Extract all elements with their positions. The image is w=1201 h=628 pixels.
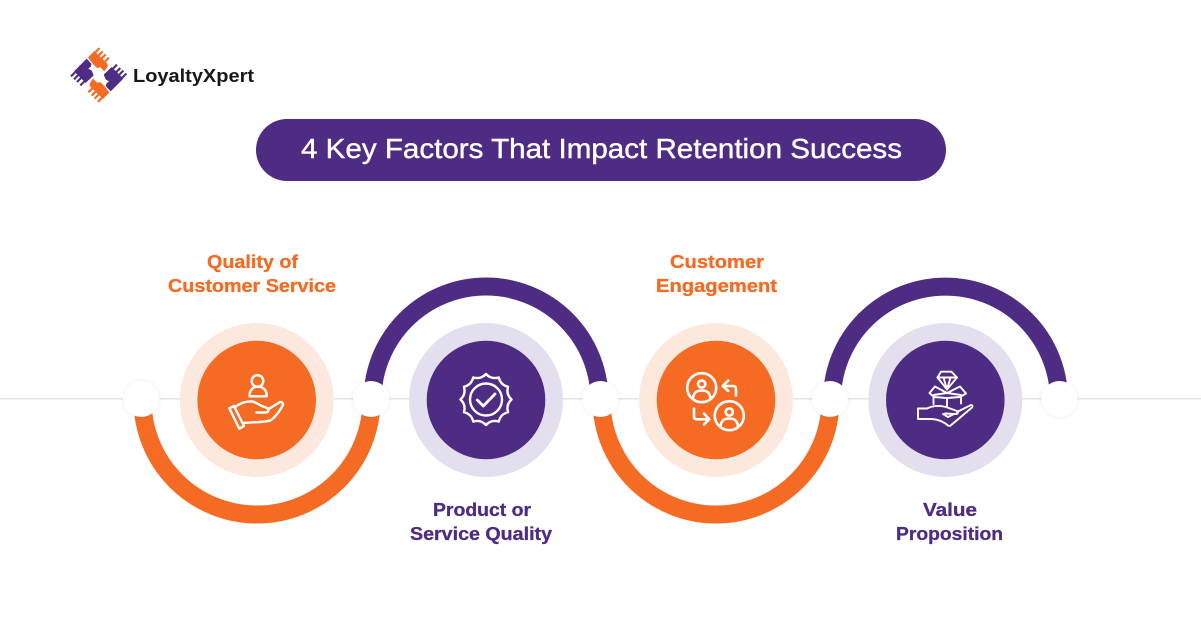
disc 3 <box>657 341 775 459</box>
arc 4: purple <box>832 287 1059 400</box>
icon: quality badge <box>460 374 512 425</box>
logo <box>71 48 254 102</box>
label: quality of customer service: Quality of <box>207 251 299 272</box>
timeline base line <box>0 398 1201 400</box>
timeline nodes <box>123 381 1078 417</box>
icon: hand holding person <box>229 375 283 429</box>
icon: gift box and diamond on hand <box>918 372 973 426</box>
title text: 4 Key Factors That Impact Retention Success <box>301 133 902 164</box>
arc 2: purple <box>372 286 600 400</box>
factor 4: value proposition <box>868 323 1022 477</box>
logo mark: four hands <box>71 48 126 102</box>
disc 4 <box>886 341 1005 459</box>
label: quality of customer service: Customer Service <box>168 275 336 296</box>
ring 3 <box>639 323 793 477</box>
factor 2: product or service quality <box>409 323 563 477</box>
ring 1 <box>180 323 334 477</box>
factor 1: quality of customer service <box>180 323 334 477</box>
label: value proposition: Proposition <box>896 523 1003 544</box>
label: customer engagement: Customer <box>670 251 764 272</box>
icon: customers exchanging <box>687 373 744 430</box>
label: product or service quality: Service Quality <box>410 523 553 544</box>
ring 4 <box>868 323 1022 477</box>
label: customer engagement: Engagement <box>656 275 777 296</box>
factor 3: customer engagement <box>639 323 793 477</box>
arc 1: orange <box>142 400 372 515</box>
disc 2 <box>427 341 545 459</box>
logo wordmark: LoyaltyXpert <box>133 65 254 86</box>
label: product or service quality: Product or <box>433 499 531 520</box>
disc 1 <box>197 341 316 459</box>
ring 2 <box>409 323 563 477</box>
label: value proposition: Value <box>923 499 977 520</box>
title pill <box>256 119 946 181</box>
arc 3: orange <box>602 400 830 515</box>
